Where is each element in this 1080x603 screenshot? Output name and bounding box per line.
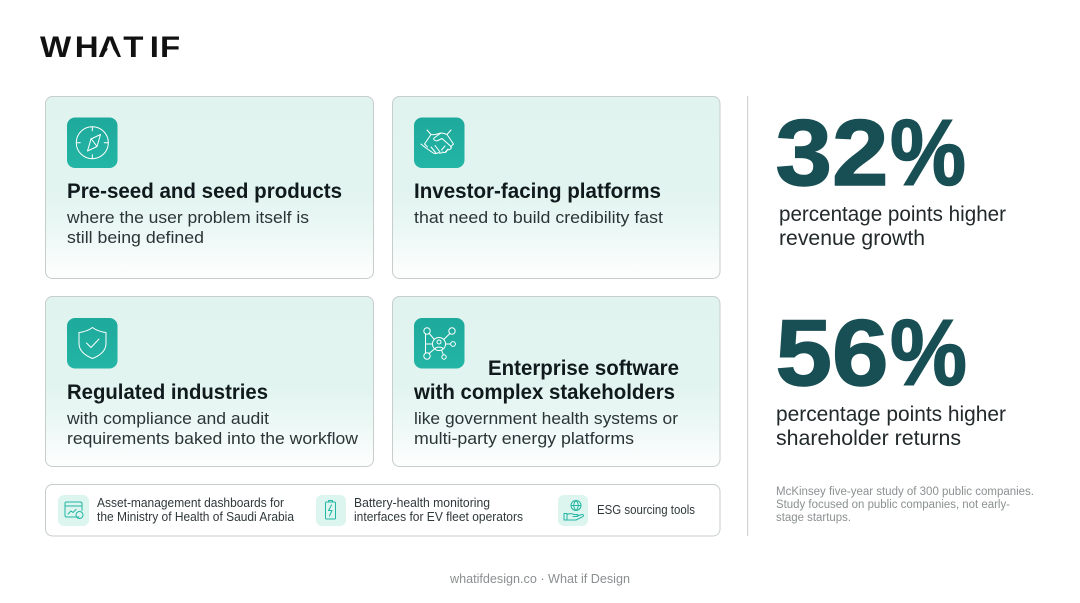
- icon: dashboard: [58, 495, 89, 526]
- source note: Study focused on public companies, not early-: [776, 499, 1010, 511]
- source note: stage startups.: [776, 512, 851, 524]
- description: [66, 409, 359, 448]
- example text: battery health: Battery-health monitoring: [354, 496, 490, 510]
- stat label: [779, 203, 1006, 250]
- example text: battery health: interfaces for EV fleet operators: [354, 510, 523, 524]
- stat value percent sign: %: [890, 100, 966, 205]
- icon: stakeholder network: [414, 318, 464, 368]
- description: still being defined: [67, 228, 204, 247]
- description: like government health systems or: [414, 409, 678, 428]
- logo: WHAT IF: WHAT IF: [40, 31, 180, 64]
- stat label: percentage points higher: [779, 203, 1006, 226]
- panel: enterprise software: [392, 296, 720, 466]
- icon: ESG hand and globe: [558, 495, 588, 526]
- heading: Investor-facing platforms: [414, 180, 661, 203]
- icon: shield: [67, 318, 118, 368]
- stat: 32%: [776, 100, 1006, 250]
- panel: investor-facing platforms: [392, 96, 720, 278]
- stat value percent sign: %: [890, 300, 967, 405]
- example text: battery health: [354, 496, 523, 524]
- heading: Regulated industries: [67, 381, 268, 404]
- icon: compass: [67, 118, 118, 168]
- icon: handshake: [414, 118, 464, 168]
- stat value digits: 56: [776, 300, 888, 405]
- description: [414, 409, 678, 448]
- footer: whatifdesign.co · What if Design: [449, 571, 630, 586]
- heading: Enterprise software: [488, 357, 679, 380]
- icon: battery: [316, 495, 346, 526]
- stat label: [776, 403, 1006, 450]
- example text: ESG: ESG sourcing tools: [597, 503, 695, 517]
- source note: [776, 486, 1034, 524]
- source note: McKinsey five-year study of 300 public companies.: [776, 486, 1034, 498]
- description: with compliance and audit: [66, 409, 269, 428]
- description: requirements baked into the workflow: [67, 429, 359, 448]
- stat label: percentage points higher: [776, 403, 1006, 426]
- example text: dashboards: [97, 496, 294, 524]
- heading: with complex stakeholders: [413, 381, 675, 404]
- example text: dashboards: Asset-management dashboards for: [97, 496, 284, 510]
- panel: regulated industries: [46, 296, 374, 466]
- description: that need to build credibility fast: [414, 208, 663, 227]
- stat label: revenue growth: [779, 227, 925, 250]
- stat label: shareholder returns: [776, 427, 961, 450]
- panel: example products strip: [46, 484, 720, 536]
- stat value digits: 32: [776, 100, 888, 205]
- heading: Pre-seed and seed products: [67, 180, 342, 203]
- description: [66, 208, 309, 247]
- example text: dashboards: the Ministry of Health of Saudi Arabia: [97, 510, 294, 524]
- description: where the user problem itself is: [66, 208, 309, 227]
- panel: pre-seed and seed products: [46, 96, 374, 278]
- description: multi-party energy platforms: [414, 429, 634, 448]
- heading: [413, 357, 679, 404]
- stat: 56%: [776, 300, 1006, 450]
